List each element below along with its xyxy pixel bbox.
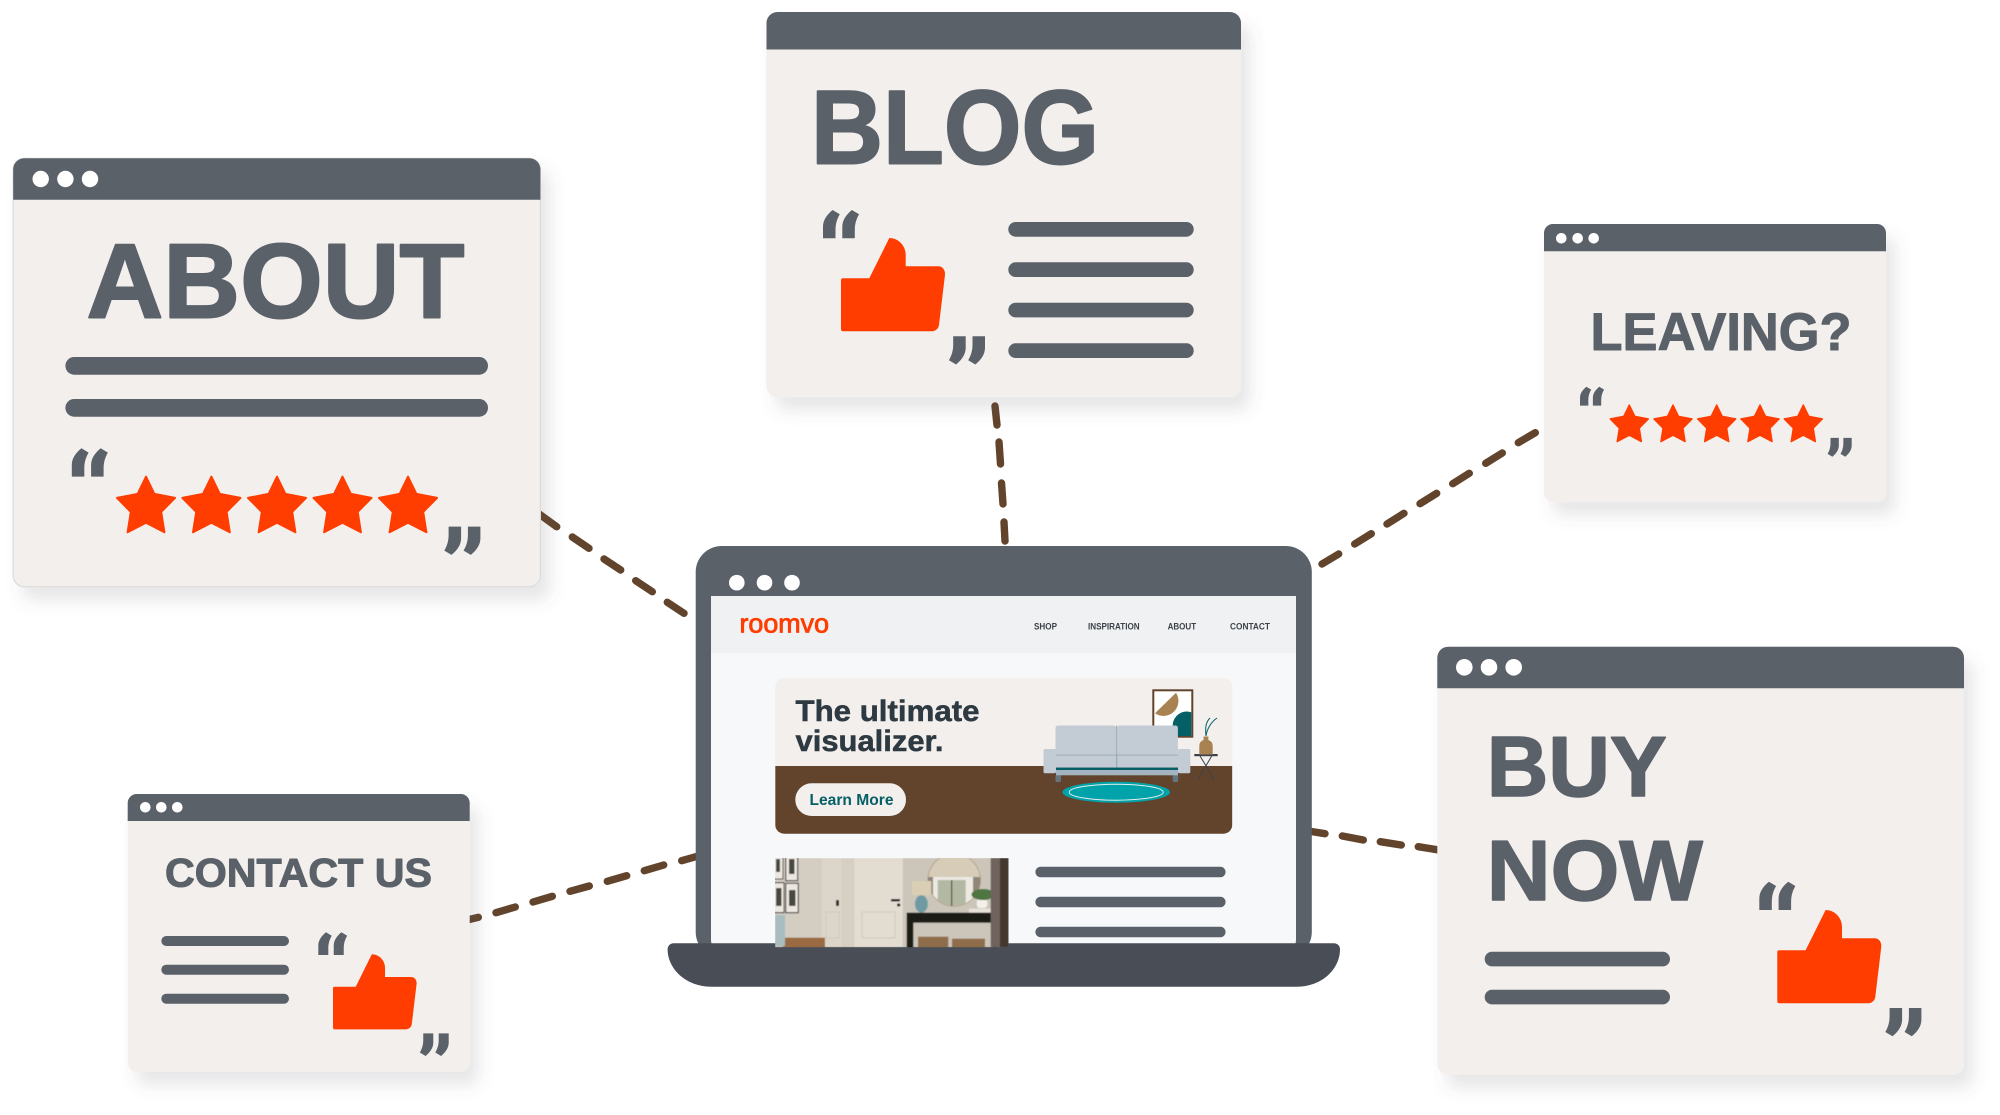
laptop: [668, 546, 1340, 987]
about panel background: [13, 158, 540, 587]
buy now heading: NOW: [1487, 824, 1704, 919]
buy now text lines: [1485, 952, 1670, 1004]
room photo: [772, 850, 1009, 948]
leaving title bar: [1544, 224, 1886, 251]
contact window dots: [140, 802, 183, 813]
contact title bar: [128, 794, 470, 821]
contact panel background: [128, 794, 470, 1072]
buy now heading: [1487, 720, 1704, 919]
about text lines: [65, 357, 488, 417]
about closing quote: [444, 527, 480, 555]
blog panel background: [766, 12, 1241, 397]
laptop camera dots: [729, 575, 800, 590]
rug: [1062, 782, 1170, 803]
connector: buy now to laptop: [1305, 830, 1445, 851]
buy now panel background: [1437, 647, 1964, 1075]
buy now opening quote: [1759, 882, 1795, 910]
blog title bar: [766, 12, 1241, 50]
blog opening quote: [823, 210, 859, 238]
contact closing quote: [420, 1033, 449, 1056]
learn more button: [795, 783, 906, 816]
banner headline: The ultimate: [796, 695, 980, 728]
laptop body: [696, 546, 1312, 958]
contact text lines: [161, 936, 289, 1004]
contact thumbs up: [333, 954, 417, 1029]
leaving heading: LEAVING?: [1590, 303, 1852, 362]
learn more button: Learn More: [810, 792, 894, 809]
nav links: SHOP: [1034, 622, 1057, 633]
window: contact us: [128, 794, 470, 1072]
nav links: CONTACT: [1230, 622, 1270, 633]
window: blog: [766, 12, 1241, 397]
connector: blog to laptop: [995, 406, 1005, 541]
contact heading: CONTACT US: [165, 852, 432, 896]
site nav bar: [711, 596, 1296, 653]
blog thumbs up: [841, 238, 945, 331]
blog text lines: [1008, 222, 1194, 358]
window: about: [13, 158, 540, 587]
buy now window dots: [1456, 659, 1522, 676]
buy now heading: BUY: [1487, 720, 1667, 815]
wall art: [1153, 690, 1192, 737]
buy now closing quote: [1885, 1008, 1921, 1036]
about opening quote: [72, 448, 108, 477]
about title bar: [13, 158, 540, 200]
laptop screen: [711, 596, 1296, 952]
leaving window dots: [1556, 233, 1599, 244]
leaving closing quote: [1828, 438, 1852, 457]
contact opening quote: [318, 932, 347, 955]
nav links: [1034, 622, 1270, 633]
hero banner: [775, 678, 1232, 834]
buy now thumbs up: [1777, 910, 1881, 1003]
connector: leaving to laptop: [1322, 433, 1535, 564]
side table and vase: [1194, 718, 1218, 779]
content text lines: [1035, 867, 1226, 937]
about heading: ABOUT: [86, 223, 464, 341]
about five stars: [117, 477, 437, 532]
sofa: [1044, 726, 1190, 782]
connector: contact to laptop: [465, 856, 700, 920]
blog heading: BLOG: [811, 70, 1099, 187]
buy now title bar: [1437, 647, 1964, 688]
blog closing quote: [949, 336, 985, 364]
banner headline: [796, 695, 980, 758]
about window dots: [32, 171, 98, 187]
window: leaving: [1544, 224, 1886, 502]
laptop base: [668, 943, 1340, 987]
leaving panel background: [1544, 224, 1886, 502]
banner background: [775, 678, 1232, 834]
leaving five stars: [1610, 405, 1822, 442]
nav links: INSPIRATION: [1088, 622, 1140, 633]
banner headline: visualizer.: [796, 725, 944, 758]
roomvo logo: roomvo: [740, 609, 829, 639]
dashed connectors: [465, 406, 1535, 920]
window: buy now: [1437, 647, 1964, 1075]
leaving opening quote: [1580, 387, 1604, 406]
connector: about to laptop: [535, 511, 684, 613]
nav links: ABOUT: [1168, 622, 1196, 633]
